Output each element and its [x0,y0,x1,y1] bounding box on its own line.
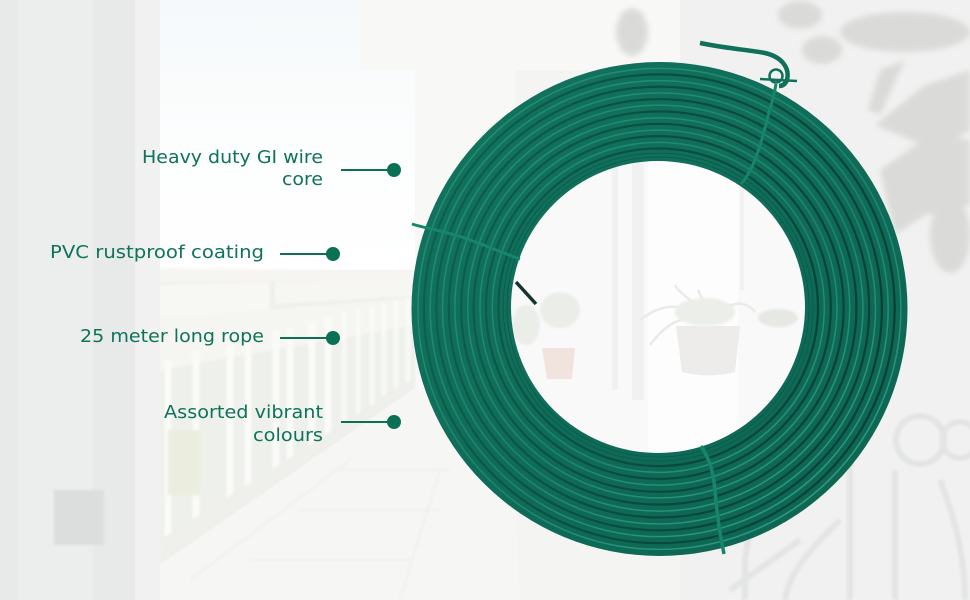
window frame lines [612,0,746,400]
label: Heavy duty GI wire core [142,148,323,190]
callout: PVC rustproof coating [280,247,340,261]
fine ribbing on inner turns [503,153,813,461]
hanging plant [640,285,755,376]
left door panel [0,0,135,600]
plant in small pot [512,292,580,379]
label: Heavy duty GI wire core: core [282,170,323,190]
balcony railing [160,268,415,565]
left binding wire [412,224,520,259]
label: Assorted vibrant colours [164,403,323,446]
label: PVC rustproof coating: PVC rustproof coating [50,243,264,263]
label: Assorted vibrant colours: Assorted vibrant [164,403,323,423]
leaf shadows top right [616,1,970,273]
coil body [412,62,908,556]
wire coil [412,62,908,556]
highlights on wire turns [418,68,901,549]
label: Heavy duty GI wire core: Heavy duty GI wire [142,148,323,168]
balcony floor [160,388,520,600]
wire tail end [516,282,536,304]
wall on the right [680,0,970,600]
callout: 25 meter long rope [280,331,340,345]
callout: Heavy duty GI wire core [341,163,401,177]
label: 25 meter long rope: 25 meter long rope [80,327,264,347]
bottom binding wire [701,446,724,554]
ironwork bottom right [730,416,970,600]
dark gaps between wire turns [424,74,895,543]
top binding wire [741,84,776,184]
leaf at hole edge [758,309,798,327]
callout: Assorted vibrant colours [341,415,401,429]
sky and upper wall [160,0,415,270]
label: Assorted vibrant colours: colours [253,426,323,446]
top hook [700,43,797,86]
